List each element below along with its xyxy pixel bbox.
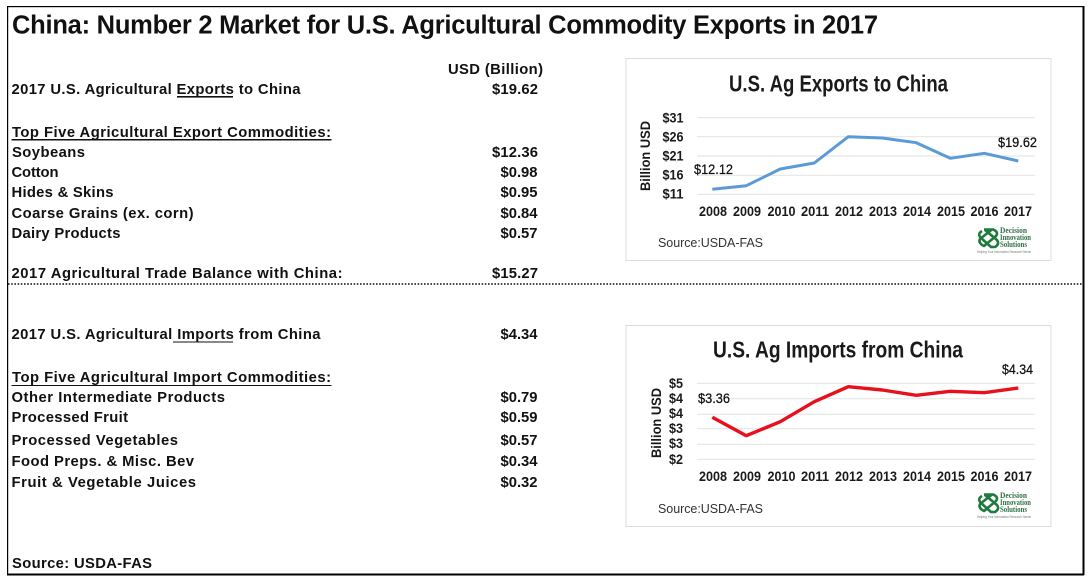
- x axis labels: 2015: [937, 203, 965, 219]
- x axis labels: 2010: [768, 468, 796, 484]
- x axis labels: 2014: [903, 203, 931, 219]
- chart title: U.S. Ag Exports to China: [729, 70, 948, 96]
- x axis labels: 2008: [699, 468, 727, 484]
- export commodities heading: Top Five Agricultural Export Commodities:: [12, 125, 331, 141]
- import row: food preps: [12, 454, 538, 470]
- x axis labels: 2016: [970, 468, 999, 484]
- import row: food preps: $0.34: [500, 454, 538, 470]
- y axis labels: $4: [669, 405, 683, 421]
- x axis labels: 2012: [835, 468, 863, 484]
- x axis labels: 2014: [903, 468, 931, 484]
- export row: soybeans: [12, 145, 538, 161]
- y axis labels: $4: [669, 390, 683, 406]
- data label 2008: $3.36: [698, 390, 730, 406]
- y axis title: Billion USD: [648, 388, 664, 458]
- x axis labels: 2011: [801, 203, 829, 219]
- export row: hides and skins: Hides & Skins: [12, 185, 114, 201]
- export row: coarse grains: [12, 206, 538, 222]
- y axis labels: $11: [662, 186, 684, 202]
- x axis labels: 2017: [1004, 468, 1032, 484]
- data label 2008: $12.12: [694, 161, 733, 177]
- import row: fruit and vegetable juices: [12, 475, 538, 491]
- import total row: $4.34: [500, 327, 538, 343]
- icon: decision innovation solutions logo: Solutions: [1000, 240, 1027, 249]
- icon: decision innovation solutions logo: Innovation: [1000, 498, 1031, 507]
- y axis labels: $16: [662, 166, 684, 182]
- export row: cotton: Cotton: [12, 165, 58, 181]
- trade balance row: [12, 266, 538, 282]
- import row: other intermediate products: [12, 390, 538, 406]
- y axis title: Billion USD: [637, 121, 653, 191]
- line series: exports: [712, 137, 1018, 189]
- y axis labels: $3: [669, 420, 683, 436]
- panel: exports chart: [626, 58, 1051, 260]
- import row: processed fruit: $0.59: [500, 410, 538, 426]
- export row: cotton: [12, 165, 538, 181]
- y axis labels: $2: [669, 451, 683, 467]
- import row: processed vegetables: Processed Vegetables: [12, 433, 178, 449]
- y axis labels: $5: [669, 375, 683, 391]
- panel: imports chart: [626, 326, 1051, 526]
- icon: decision innovation solutions logo: Helping Your Information Research Needs: [977, 515, 1031, 519]
- x axis labels: 2017: [1004, 203, 1032, 219]
- export row: coarse grains: Coarse Grains (ex. corn): [12, 206, 194, 222]
- export row: coarse grains: $0.84: [500, 206, 538, 222]
- chart title: U.S. Ag Imports from China: [713, 336, 963, 362]
- export total row: 2017 U.S. Agricultural Exports to China: [12, 82, 301, 98]
- import row: processed fruit: Processed Fruit: [12, 410, 128, 426]
- import row: other intermediate products: $0.79: [500, 390, 538, 406]
- y axis labels: $21: [662, 148, 684, 164]
- y axis labels: $26: [662, 128, 684, 144]
- import row: processed fruit: [12, 410, 538, 426]
- icon: decision innovation solutions logo: Decision: [1000, 491, 1028, 500]
- import total row: 2017 U.S. Agricultural Imports from China: [12, 327, 321, 343]
- x axis labels: [699, 203, 1032, 219]
- y axis labels: $31: [662, 110, 684, 126]
- import row: food preps: Food Preps. & Misc. Bev: [12, 454, 195, 470]
- y axis labels: $3: [669, 435, 683, 451]
- x axis labels: 2015: [937, 468, 965, 484]
- export row: soybeans: Soybeans: [12, 145, 85, 161]
- title: China: Number 2 Market for U.S. Agricultural Commodity Exports in 2017: [12, 12, 878, 40]
- export row: dairy products: Dairy Products: [12, 226, 120, 242]
- export row: soybeans: $12.36: [492, 145, 538, 161]
- chart source: Source:USDA-FAS: [658, 502, 763, 516]
- icon: decision innovation solutions logo: Helping Your Information Research Needs: [977, 250, 1031, 254]
- icon: decision innovation solutions logo: Solutions: [1000, 505, 1027, 514]
- chart source: Source:USDA-FAS: [658, 236, 763, 250]
- x axis labels: 2016: [970, 203, 999, 219]
- trade balance row: $15.27: [492, 266, 538, 282]
- x axis labels: 2009: [733, 203, 761, 219]
- export row: dairy products: $0.57: [500, 226, 538, 242]
- import commodities heading: Top Five Agricultural Import Commodities:: [12, 370, 331, 386]
- x axis labels: 2013: [869, 203, 897, 219]
- icon: decision innovation solutions logo: Decision: [1000, 226, 1028, 235]
- y axis labels: [662, 110, 684, 202]
- export row: hides and skins: $0.95: [500, 185, 538, 201]
- import row: other intermediate products: Other Intermediate Products: [12, 390, 225, 406]
- export total row: $19.62: [492, 82, 538, 98]
- import row: processed vegetables: [12, 433, 538, 449]
- icon: decision innovation solutions logo: [977, 226, 1031, 254]
- panel: export table: [12, 62, 543, 282]
- x axis labels: 2011: [801, 468, 829, 484]
- x axis labels: 2012: [835, 203, 863, 219]
- column header: USD (Billion): [448, 62, 543, 78]
- export total row: [12, 82, 538, 98]
- line series: imports: [712, 387, 1018, 436]
- x axis labels: [699, 468, 1032, 484]
- import row: fruit and vegetable juices: Fruit & Vegetable Juices: [12, 475, 196, 491]
- export row: hides and skins: [12, 185, 538, 201]
- y axis labels: [669, 375, 683, 467]
- import total row: [12, 327, 538, 343]
- x axis labels: 2010: [768, 203, 796, 219]
- import row: fruit and vegetable juices: $0.32: [500, 475, 538, 491]
- data label 2017: $4.34: [1002, 361, 1033, 377]
- icon: decision innovation solutions logo: [977, 491, 1031, 519]
- trade balance row: 2017 Agricultural Trade Balance with China:: [12, 266, 342, 282]
- panel: import table: [12, 327, 538, 491]
- x axis labels: 2013: [869, 468, 897, 484]
- table source note: Source: USDA-FAS: [12, 556, 152, 572]
- import row: processed vegetables: $0.57: [500, 433, 538, 449]
- export row: dairy products: [12, 226, 538, 242]
- x axis labels: 2009: [733, 468, 761, 484]
- data label 2017: $19.62: [998, 134, 1037, 150]
- export row: cotton: $0.98: [500, 165, 538, 181]
- x axis labels: 2008: [699, 203, 727, 219]
- icon: decision innovation solutions logo: Innovation: [1000, 233, 1031, 242]
